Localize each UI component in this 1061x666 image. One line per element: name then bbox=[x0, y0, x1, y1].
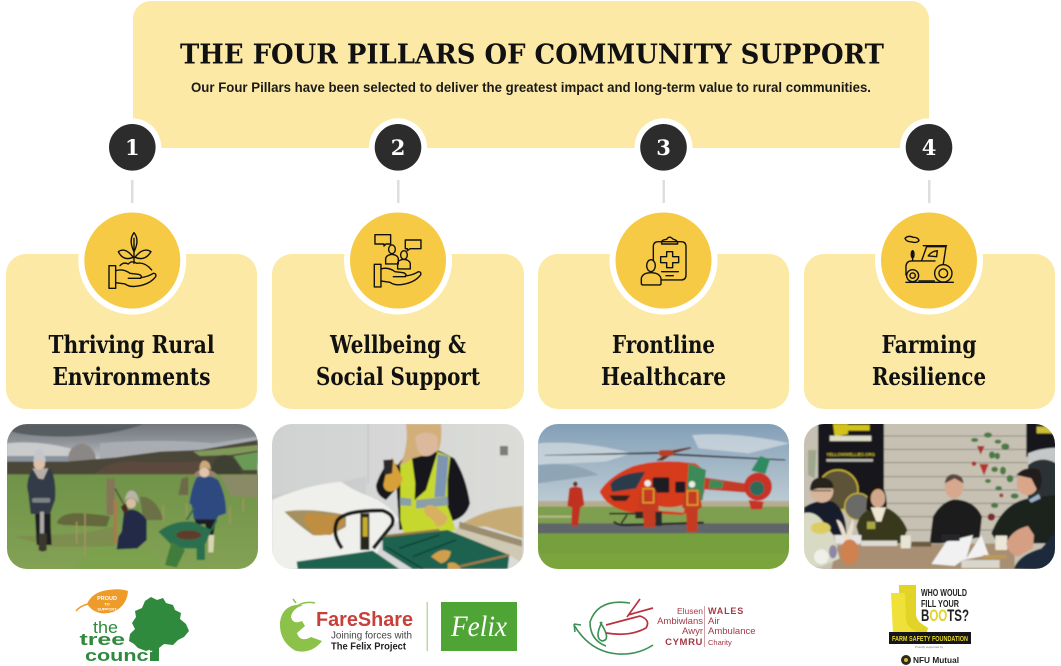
subtitle: Our Four Pillars have been selected to deliver the greatest impact and long-term value to rural communities. bbox=[191, 80, 871, 95]
logo: Who Would Fill Your Boots, Farm Safety Foundation: NFU Mutual bbox=[913, 655, 959, 665]
person: man in dark jacket bbox=[930, 499, 982, 543]
card 1: Thriving Rural Environments bbox=[6, 254, 257, 409]
number badge 4 bbox=[900, 118, 958, 176]
second crew member with white helmet bbox=[682, 489, 702, 532]
clasped hands and sleeve bbox=[1006, 526, 1034, 557]
first volunteer bbox=[35, 513, 52, 545]
photo: tree planting volunteers bbox=[7, 424, 258, 569]
logo: The Tree Council: PROUD bbox=[97, 596, 117, 602]
logo: Wales Air Ambulance: CYMRU bbox=[665, 637, 703, 648]
crates bbox=[383, 530, 509, 569]
crew member with white helmet bbox=[638, 488, 658, 527]
icon: hand holding seedling bbox=[78, 206, 186, 314]
pallet truck bbox=[335, 511, 393, 548]
title: THE FOUR PILLARS OF COMMUNITY SUPPORT bbox=[180, 38, 884, 70]
banners bbox=[818, 420, 884, 500]
person: woman with scarf bbox=[856, 508, 907, 543]
logo: FareShare and Felix: The Felix Project bbox=[331, 642, 407, 652]
logo: Wales Air Ambulance: Ambulance bbox=[708, 626, 756, 637]
leaf badge bbox=[87, 589, 128, 613]
photo: Wales Air Ambulance helicopter bbox=[538, 424, 789, 569]
logo: Who Would Fill Your Boots, Farm Safety Foundation: WHO WOULD bbox=[921, 587, 967, 599]
card 4: Farming Resilience bbox=[804, 254, 1055, 409]
number badge 3 bbox=[634, 118, 692, 176]
table bbox=[831, 543, 1015, 569]
logo: Wales Air Ambulance: Ambiwlans bbox=[657, 616, 703, 627]
person: man on right bbox=[991, 495, 1056, 543]
grain sack bbox=[272, 482, 399, 569]
logo: Wales Air Ambulance: Awyr bbox=[682, 626, 703, 637]
header panel bbox=[133, 1, 929, 148]
logo: FareShare and Felix: Joining forces with bbox=[331, 630, 412, 642]
number badge 4: 4 bbox=[922, 135, 936, 160]
tree bbox=[129, 597, 189, 661]
logo: The Tree Council: tree bbox=[80, 630, 125, 649]
logo: FareShare and Felix: Felix bbox=[450, 610, 508, 643]
logo: Wales Air Ambulance: Charity bbox=[708, 638, 732, 647]
card 1: Thriving Rural Environments: Environments bbox=[52, 362, 210, 391]
person: young man with glasses bbox=[804, 501, 846, 535]
logo: The Tree Council: council bbox=[85, 646, 160, 665]
logo: Who Would Fill Your Boots, Farm Safety Foundation: Proudly supported by bbox=[915, 645, 944, 649]
icon: tractor bbox=[875, 206, 983, 314]
cups and name cards bbox=[901, 535, 911, 548]
skids bbox=[614, 522, 704, 525]
number badge 2 bbox=[369, 118, 427, 176]
side bin bbox=[458, 506, 523, 538]
card 4: Farming Resilience: Farming bbox=[882, 330, 977, 359]
parsnips bbox=[383, 457, 403, 492]
logo: Who Would Fill Your Boots, Farm Safety Foundation bbox=[889, 585, 971, 665]
logo: Who Would Fill Your Boots, Farm Safety Foundation: FARM SAFETY FOUNDATION bbox=[892, 634, 968, 643]
logo: FareShare and Felix bbox=[280, 599, 517, 652]
flowers and vase bbox=[803, 513, 840, 567]
card 3: Frontline Healthcare bbox=[538, 254, 789, 409]
crew member walking away bbox=[567, 487, 584, 526]
photo: Farm Safety Foundation table meeting: YELLOWWELLIES.ORG bbox=[826, 452, 875, 458]
card 2: Wellbeing and Social Support: Wellbeing & bbox=[329, 330, 466, 359]
wheelbarrow bbox=[158, 521, 212, 548]
logo: Wales Air Ambulance: Air bbox=[708, 616, 720, 627]
card 2: Wellbeing and Social Support bbox=[272, 254, 524, 409]
number badge 1: 1 bbox=[125, 135, 140, 160]
third volunteer bbox=[193, 517, 217, 535]
logo: Wales Air Ambulance: Elusen bbox=[677, 606, 703, 616]
strawberry vine bbox=[971, 432, 1019, 508]
photo: FareShare volunteer sorting vegetables bbox=[272, 424, 524, 569]
crouching volunteer bbox=[113, 500, 117, 543]
icon: clipboard with medical cross and person bbox=[610, 206, 718, 314]
logo: Wales Air Ambulance bbox=[574, 599, 756, 654]
card 4: Farming Resilience: Resilience bbox=[872, 362, 986, 391]
boots bbox=[899, 585, 928, 632]
number badge 2: 2 bbox=[391, 135, 405, 160]
number badge 1 bbox=[103, 118, 161, 176]
photo: Farm Safety Foundation table meeting bbox=[804, 424, 1055, 569]
logo: Who Would Fill Your Boots, Farm Safety Foundation: FILL YOUR bbox=[921, 598, 959, 610]
card 2: Wellbeing and Social Support: Social Support bbox=[316, 362, 480, 391]
card 3: Frontline Healthcare: Healthcare bbox=[601, 362, 726, 391]
logo: The Tree Council bbox=[76, 589, 189, 665]
card 3: Frontline Healthcare: Frontline bbox=[612, 330, 715, 359]
logo: The Tree Council: SUPPORT bbox=[97, 606, 117, 612]
hi-vis vest bbox=[400, 452, 456, 543]
card 1: Thriving Rural Environments: Thriving Rural bbox=[48, 330, 214, 359]
icon: hand with people and speech bubbles bbox=[344, 206, 452, 314]
rotor blades bbox=[545, 452, 785, 461]
logo: The Tree Council: TO bbox=[104, 602, 110, 606]
logo: Wales Air Ambulance: WALES bbox=[708, 606, 744, 616]
logo: The Tree Council: the bbox=[93, 618, 118, 637]
logo: Who Would Fill Your Boots, Farm Safety Foundation: BOOTS? bbox=[921, 606, 969, 625]
number badge 3: 3 bbox=[656, 135, 671, 160]
tail bbox=[704, 477, 747, 493]
fuselage bbox=[600, 461, 706, 515]
worker jacket bbox=[376, 450, 470, 530]
logo: FareShare and Felix: FareShare bbox=[316, 609, 413, 631]
